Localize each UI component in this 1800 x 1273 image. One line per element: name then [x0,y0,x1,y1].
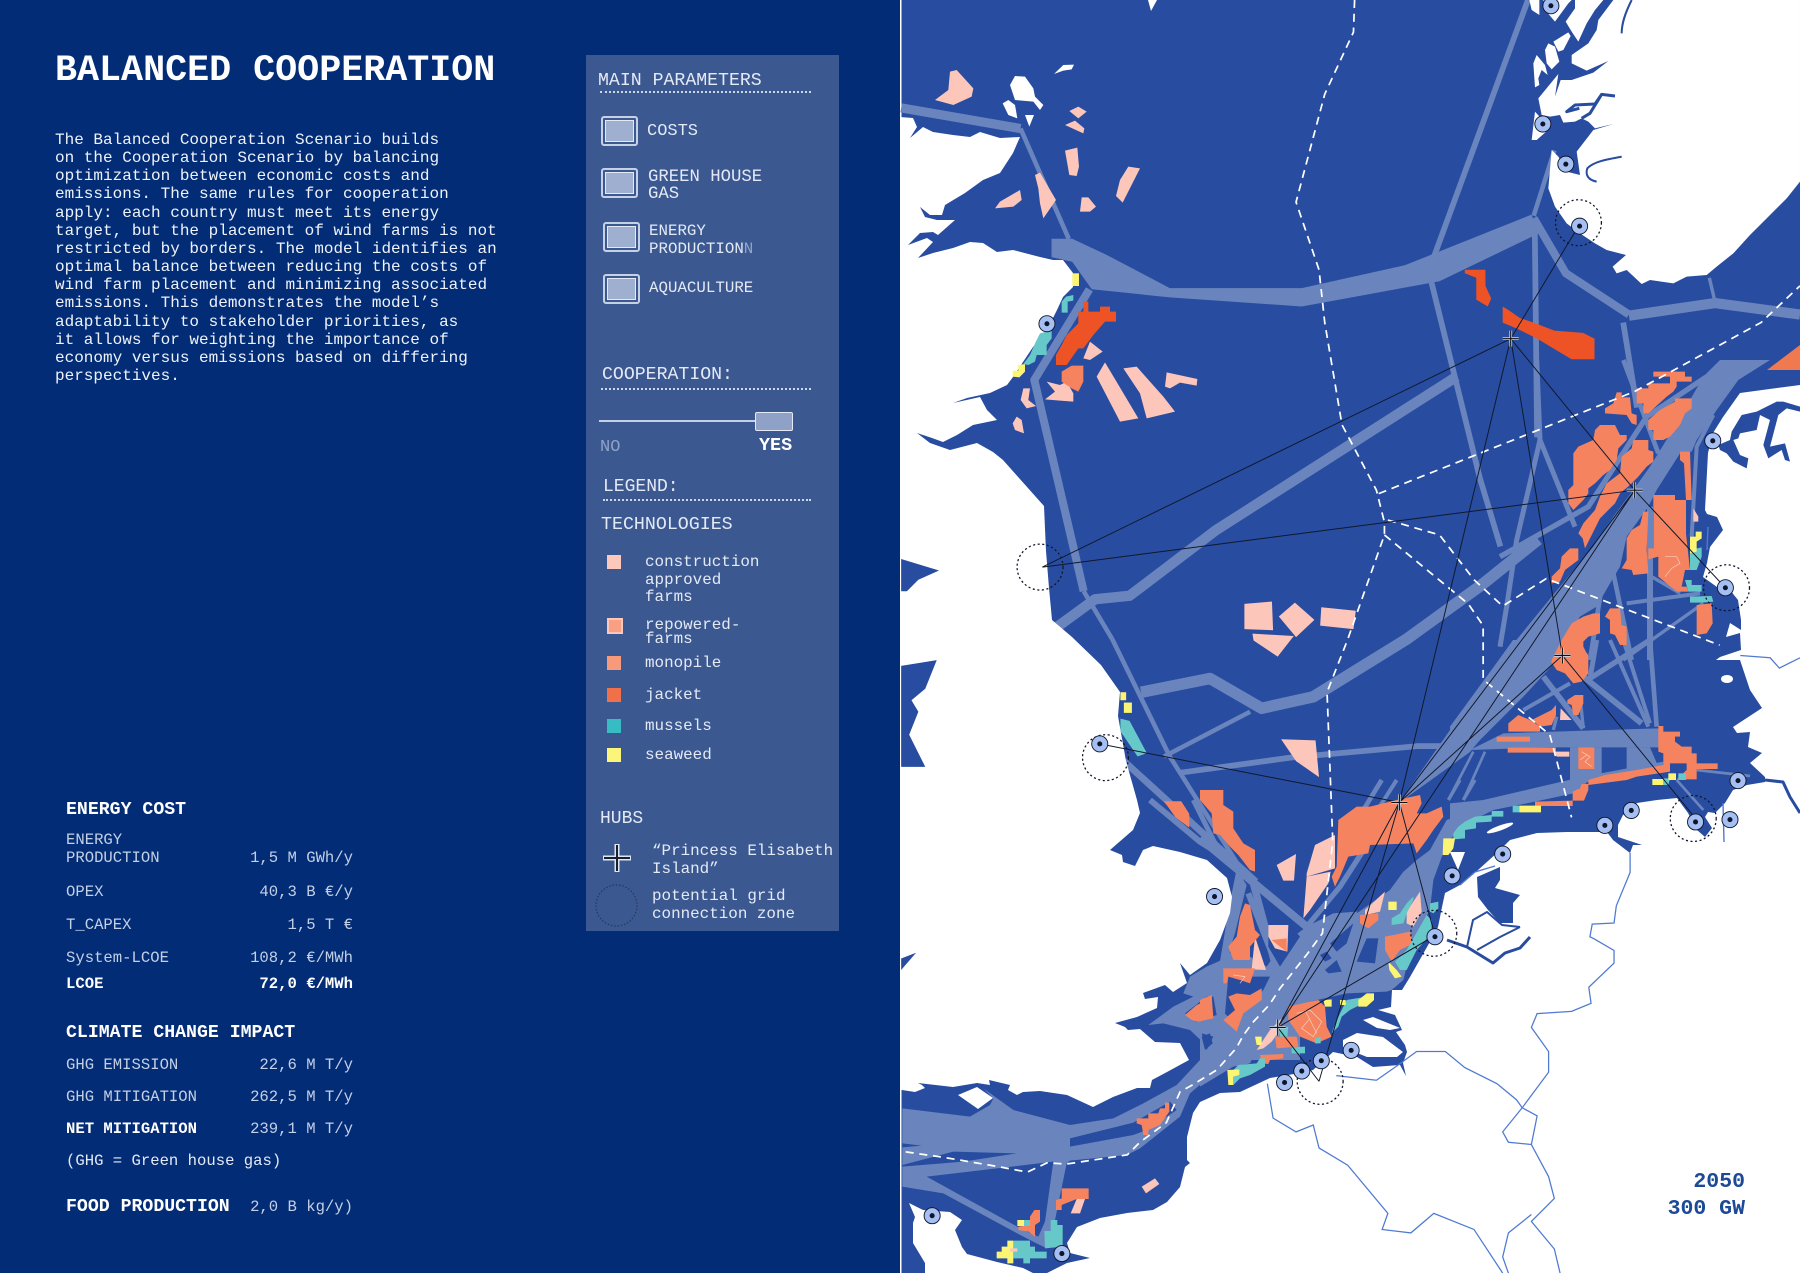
row: system lcoe [66,949,353,967]
grid connection points [924,0,1746,1262]
land: great britain [900,117,1232,1107]
row: system lcoe: System-LCOE [66,949,169,967]
heading: main parameters: MAIN PARAMETERS [598,71,762,91]
row: ghg mitigation [66,1088,353,1106]
map: north sea wind farm scenario [900,0,1800,1273]
legend item: monopile: monopile [645,654,721,672]
legend item: mussels: mussels [645,717,712,735]
row: lcoe: 72,0 €/MWh [259,975,353,993]
icon: dotted circle [595,884,638,927]
gaps: thames approaches [1185,997,1217,1050]
legend item: seaweed: seaweed [645,746,712,764]
checkbox: aquaculture: AQUACULTURE [649,279,753,297]
farm: thames estuary [1185,995,1213,1022]
scenario year and capacity label: 2050 300 GW [1668,1170,1745,1220]
row: ghg emission: 22,6 M T/y [259,1056,353,1074]
checkbox: aquaculture [603,274,753,304]
grid connection lines [1042,226,1725,1081]
country borders [1267,655,1800,1273]
legend item: seaweed [607,746,712,764]
legend item: monopile [607,654,721,672]
label: no: NO [600,438,620,457]
farms: southern bight [1200,790,1455,1085]
legend item: mussels [607,717,712,735]
legend item: construction approved farms: construction approved farms [645,553,759,606]
row: lcoe [66,975,353,993]
panel: energy cost figures [66,800,353,993]
icon: hub cross [603,844,631,872]
heading: energy cost: ENERGY COST [66,800,186,820]
farms: scottish coast [1013,273,1116,392]
farm: yorkshire coast [1164,801,1189,828]
checkbox: costs: COSTS [647,122,698,141]
checkbox: green house gas: GREEN HOUSE GAS [648,168,762,204]
row: net mitigation: 239,1 M T/y [250,1120,353,1138]
norwegian islands [1529,0,1603,140]
land: norway [1529,0,1800,284]
label: yes: YES [759,435,792,456]
legend item: jacket: jacket [645,686,702,704]
gaps: southern bight [1202,840,1417,1050]
row: opex: OPEX [66,883,103,901]
blue gaps inside the lanes [902,840,1417,1237]
legend item: potential grid connection zone [595,884,795,927]
gaps: english channel [902,1102,1177,1237]
fjord strokes and rivers [1447,0,1800,963]
row: opex [66,883,353,901]
shipping lanes [901,0,1800,1248]
grid connection point centres [930,3,1741,1256]
heading: technologies: TECHNOLOGIES [601,515,733,535]
farms: construction approved, north [935,70,1197,433]
farms: construction approved, centre [1244,602,1356,777]
row: energy production [66,831,353,867]
land: denmark germany netherlands belgium france [1047,385,1800,1273]
food production figure [66,1197,353,1217]
food production figure: FOOD PRODUCTION [66,1197,230,1217]
row: ghg emission: GHG EMISSION [66,1056,178,1074]
lanes: north and west [901,0,1800,882]
lanes: english channel [902,1030,1240,1248]
intro text block: The Balanced Cooperation Scenario builds on the Cooperation Scenario by balancing optimization between economic costs and emissions. The same rules for cooperation apply: each country must meet its energy target, but the placement of wind farms is not restricted by borders. The model identifies an optimal balance between reducing the costs of wind farm placement and minimizing associated emissions. This demonstrates the model’s adaptability to stakeholder priorities, as it allows for weighting the importance of economy versus emissions based on differing perspectives. [55,131,497,385]
checkbox: costs [601,116,698,146]
row: energy production: 1,5 M GWh/y [250,849,353,867]
maritime boundaries [902,0,1800,1172]
construction farms: german bight [1555,708,1572,757]
row: ghg emission [66,1056,353,1074]
fjords and inland water [901,402,1800,970]
row: ghg mitigation: GHG MITIGATION [66,1088,197,1106]
lanes: thames approaches [1148,800,1300,1060]
row: t_capex: T_CAPEX [66,916,132,934]
sea [902,0,1800,1273]
slider: cooperation yes [599,412,793,457]
danish fjords [1718,402,1800,468]
farms: german bight [1453,640,1718,839]
row: t_capex: 1,5 T € [287,916,353,934]
land: cotentin [909,1203,1033,1273]
heading: hubs: HUBS [600,809,643,829]
heading: cooperation: COOPERATION: [602,365,733,385]
row: net mitigation: NET MITIGATION [66,1120,197,1138]
heading: climate change impact: CLIMATE CHANGE IMPACT [66,1023,295,1043]
panel: climate change impact figures [66,1023,353,1170]
white islets [1343,675,1733,1057]
farm pattern lines [1233,975,1322,1037]
lanes: danish sector [1500,360,1770,660]
land [900,0,1800,1273]
legend item: princess elisabeth island: “Princess Elisabeth Island” [652,842,833,878]
lanes: german bight [1450,640,1750,832]
farm: skagerrak edge [1767,345,1800,370]
potential grid connection zones [1017,200,1749,1104]
aquaculture: english coast [1120,692,1147,757]
construction farms: southern bight [1252,835,1422,1050]
hubs: princess elisabeth islands [1270,331,1643,1035]
legend item: jacket [607,686,702,704]
farm: norwegian sector [1465,270,1491,307]
row: t_capex [66,916,353,934]
aquaculture: german coast [1453,773,1686,839]
food production figure: 2,0 B kg/y) [250,1198,353,1216]
heading: legend: LEGEND: [603,477,679,497]
farms and aquaculture: english channel [997,1103,1169,1263]
title: BALANCED COOPERATION [55,50,495,92]
legend item: potential grid connection zone: potential grid connection zone [652,887,795,923]
checkbox: energy production [603,222,753,258]
farms: danish sector [1552,372,1713,660]
aquaculture: dutch and belgian coast [1227,838,1455,1085]
wind farms and aquaculture [935,70,1800,1263]
slider knob [755,412,793,431]
legend item: repowered farms: repowered- farms [645,616,740,648]
row: lcoe: LCOE [66,975,103,993]
row: ghg mitigation: 262,5 M T/y [250,1088,353,1106]
row: opex: 40,3 B €/y [259,883,353,901]
row: net mitigation [66,1120,353,1138]
checkbox: energy production: ENERGY PRODUCTIONN [649,222,753,258]
panel: parameters and legend [586,55,839,931]
aquaculture: danish coast [1685,508,1713,603]
islands: orkney and shetland [1003,65,1074,127]
note: ghg definition: (GHG = Green house gas) [66,1152,281,1170]
row: energy production: ENERGY PRODUCTION [66,831,160,867]
thin dikes and streams [1460,527,1724,885]
island: south coast [958,1087,993,1109]
lanes: southern bight [1200,780,1520,1087]
row: system lcoe: 108,2 €/MWh [250,949,353,967]
